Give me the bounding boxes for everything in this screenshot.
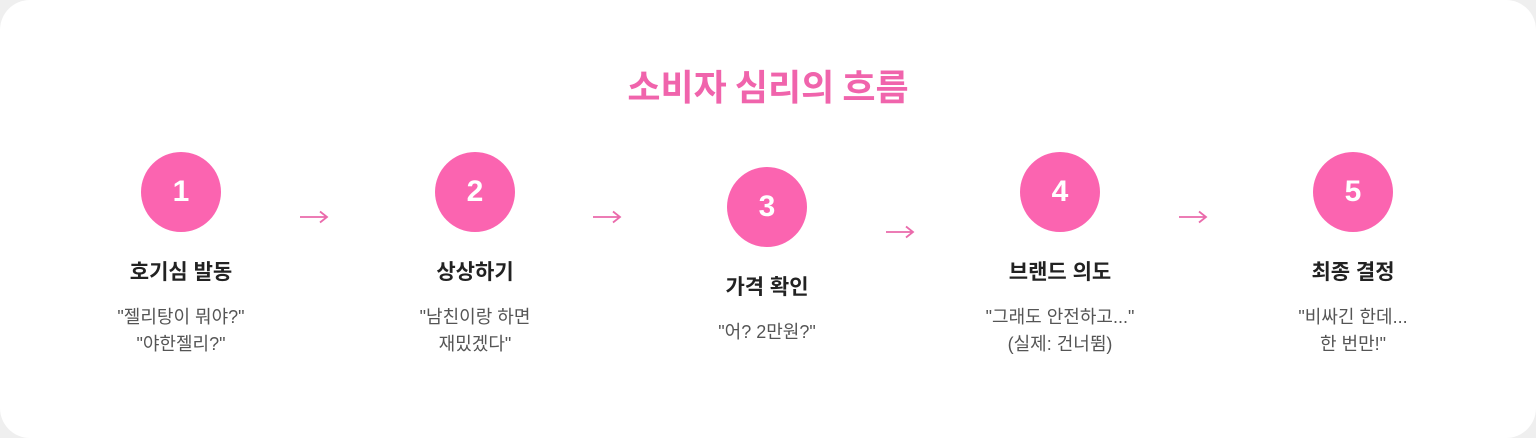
arrow 1 [300, 210, 328, 224]
step 5: "비싸긴 한데... [1298, 307, 1408, 327]
arrow 3 [886, 226, 914, 238]
step 4: 브랜드 의도 [1009, 261, 1111, 284]
step 3: 3 [759, 190, 775, 223]
step 1: "젤리탕이 뭐야?" [117, 307, 245, 327]
step 5: 한 번만!" [1320, 334, 1386, 354]
arrow 2 [593, 210, 622, 224]
step 3: "어? 2만원?" [718, 322, 816, 342]
step 5 [1298, 152, 1408, 354]
step 4 [986, 152, 1134, 354]
step 1: 1 [173, 175, 189, 208]
step 3: 가격 확인 [725, 276, 809, 299]
step 2: 2 [467, 175, 483, 208]
step 2: 재밌겠다" [439, 334, 511, 354]
step 1: "야한젤리?" [136, 334, 226, 354]
step 1: 호기심 발동 [130, 261, 232, 284]
step 1 [117, 152, 245, 354]
step 2: 상상하기 [436, 261, 514, 284]
step 4: 4 [1052, 175, 1068, 208]
arrow 4 [1179, 210, 1208, 224]
step 5: 최종 결정 [1311, 261, 1395, 284]
step 5: 5 [1345, 175, 1361, 208]
step 3 [718, 167, 816, 342]
step 4: (실제: 건너뜀) [1008, 334, 1112, 354]
step 2 [420, 152, 530, 354]
step 4: "그래도 안전하고..." [986, 307, 1134, 327]
title: 소비자 심리의 흐름 [627, 59, 909, 111]
step 2: "남친이랑 하면 [420, 307, 530, 327]
